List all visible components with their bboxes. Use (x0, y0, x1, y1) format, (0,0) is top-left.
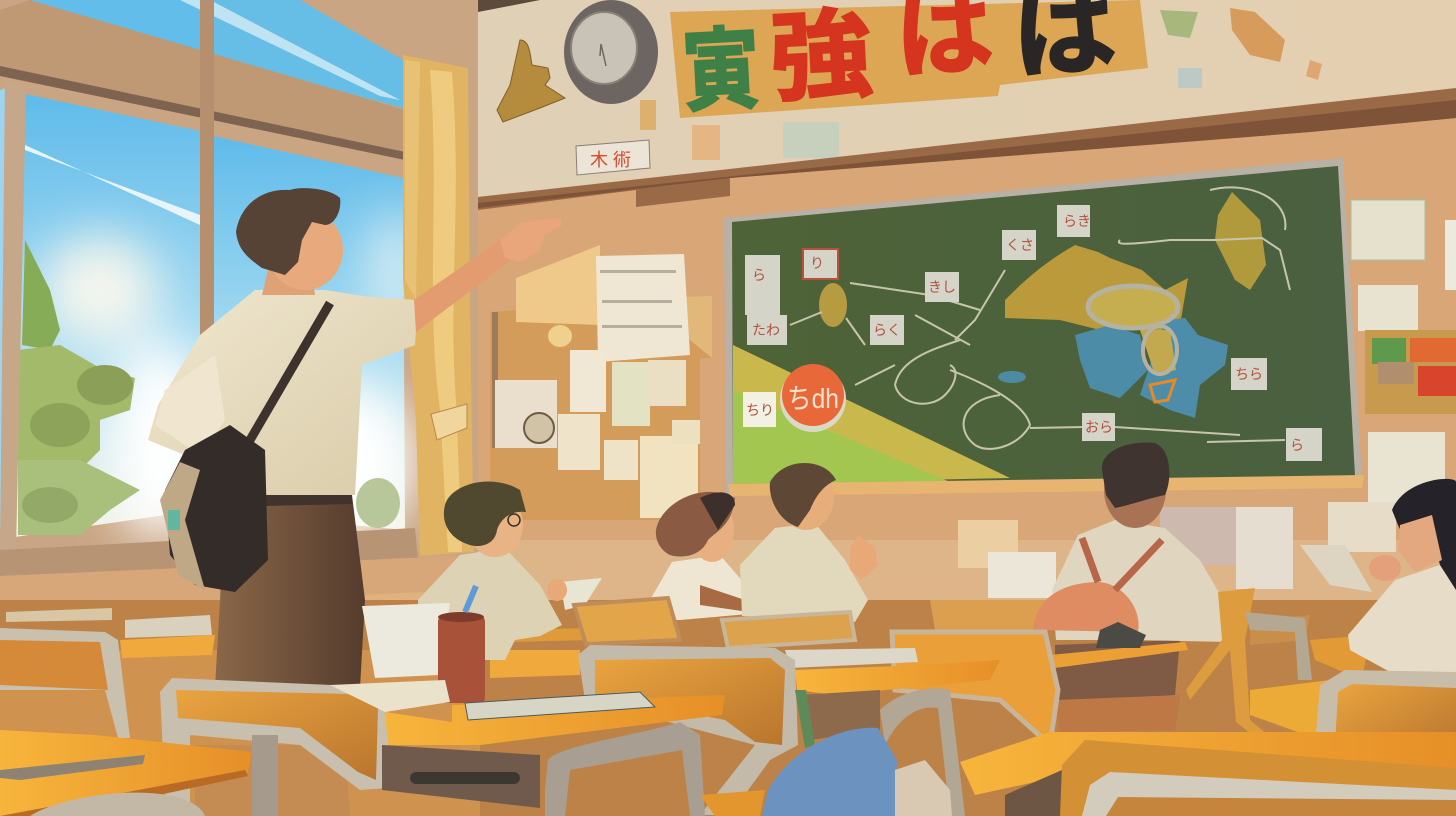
red note marks: ら (1290, 437, 1304, 453)
top left glass pane (28, 0, 203, 53)
red note marks: ちら (1235, 366, 1263, 382)
belt (262, 490, 352, 506)
chalk lines (790, 187, 1290, 449)
notices (495, 254, 700, 518)
book on desk (465, 692, 655, 720)
map: gold land (1005, 245, 1188, 330)
pen cup (438, 586, 490, 703)
right wall notices (958, 200, 1456, 598)
face (1398, 515, 1442, 572)
wall clock (564, 0, 658, 104)
satchel (160, 425, 268, 592)
banner: 強 (767, 0, 875, 114)
left chair (0, 628, 130, 738)
window rail (0, 0, 405, 160)
corkboard (490, 245, 712, 520)
raised hand (850, 535, 878, 580)
map: gray ovals (1088, 286, 1178, 328)
hair (1102, 442, 1169, 508)
red note marks: おら (1085, 419, 1113, 435)
small sign (576, 140, 650, 175)
head (778, 464, 834, 530)
orange seal (780, 364, 846, 432)
desk: centre right (795, 660, 1000, 816)
hair (656, 492, 735, 556)
red note marks: ら (752, 267, 766, 283)
red note marks: くさ (1006, 237, 1034, 253)
ceiling corner (455, 0, 540, 12)
neck (262, 260, 315, 295)
head (690, 498, 734, 562)
clouds (40, 210, 415, 540)
hair (236, 188, 340, 275)
window (0, 0, 478, 610)
teacher (148, 188, 562, 688)
main right glass pane (213, 136, 405, 530)
back chair A (574, 598, 680, 644)
note cards (743, 205, 1322, 461)
chair: foreground left (160, 678, 388, 816)
chair: foreground right (1060, 740, 1456, 816)
worn wall patches (640, 8, 1322, 160)
red note marks: り (810, 255, 824, 271)
back chair C (892, 632, 1058, 745)
paper sheets (330, 680, 450, 712)
map: blue sea (1075, 325, 1148, 398)
shirt (1052, 520, 1236, 642)
trousers (215, 495, 365, 688)
back chair B (722, 612, 855, 648)
shoulder strap (250, 303, 330, 440)
red note marks: ちり (746, 402, 774, 418)
body (1348, 565, 1456, 672)
blue backpack (700, 728, 952, 816)
window sill (0, 528, 418, 576)
curtain (403, 55, 474, 556)
open white binder (362, 603, 450, 678)
colourful poster (1365, 330, 1456, 414)
raised arm (414, 240, 514, 332)
open books on back desk (785, 648, 918, 668)
white shirt (650, 555, 772, 620)
chair: right back (1186, 588, 1312, 738)
red note marks: たわ (752, 322, 780, 338)
red note marks (746, 213, 1304, 453)
sunlight on board (733, 345, 1010, 484)
foreground books on left desk (362, 586, 490, 703)
hair (1392, 479, 1456, 590)
chalkboard (724, 158, 1364, 496)
student 4 (1033, 442, 1293, 648)
head (467, 493, 523, 557)
hand (500, 218, 562, 262)
hand and paper (560, 578, 602, 610)
shirt (148, 290, 418, 495)
green strap (795, 690, 815, 748)
chair: right edge (1315, 670, 1456, 752)
orange backpack (1033, 582, 1139, 632)
orange seal: ちdh (787, 383, 839, 414)
wall molding (478, 88, 1456, 210)
hand (1369, 555, 1401, 581)
hair (444, 481, 526, 546)
back row chairs and desks (0, 598, 1058, 745)
banner text: 寅 (680, 20, 763, 124)
desk: foreground right (960, 732, 1456, 816)
tree (18, 240, 400, 535)
shirt (740, 523, 868, 622)
red note marks: らく (873, 322, 901, 338)
upper wall (478, 0, 1456, 197)
student 2 (650, 492, 772, 620)
banner (670, 0, 1148, 124)
mullions (200, 0, 214, 512)
chalk tray (728, 475, 1364, 496)
chair: foreground centre (578, 645, 798, 815)
small sign: 木 術 (590, 150, 631, 170)
red note marks: らき (1063, 213, 1091, 229)
desk frame (545, 722, 705, 816)
curtain tie (431, 404, 467, 440)
student 3 (740, 463, 878, 622)
bronze figure (497, 40, 565, 122)
student 5 (1348, 479, 1456, 672)
head (267, 210, 343, 290)
floor and back furniture (0, 600, 1456, 816)
board surface (732, 166, 1355, 484)
student 1 (418, 481, 602, 660)
desk: foreground centre (330, 680, 725, 816)
hair (770, 463, 836, 527)
red note marks: きし (928, 279, 956, 295)
head (1104, 452, 1166, 528)
board frame (724, 158, 1362, 494)
standing paper (1236, 507, 1293, 589)
desk: foreground left (0, 730, 252, 816)
top right glass pane (214, 0, 403, 108)
main left glass pane (15, 94, 200, 537)
map: peninsula (1140, 330, 1176, 375)
shirt (418, 548, 562, 660)
